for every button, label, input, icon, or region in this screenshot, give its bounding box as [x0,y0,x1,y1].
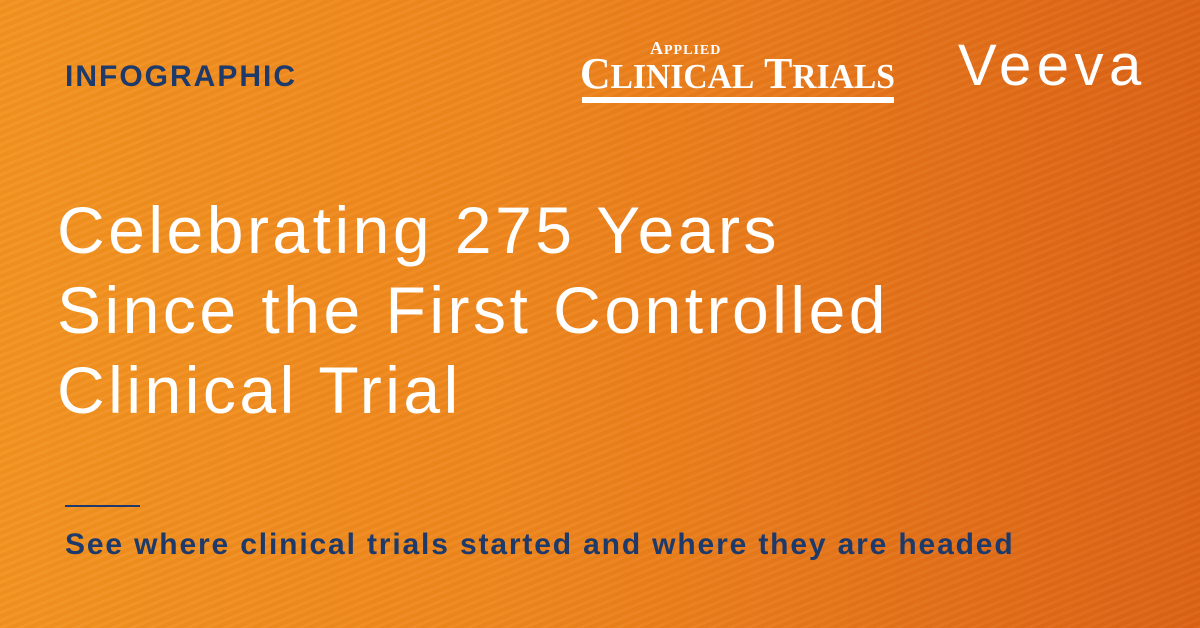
title: Since the First Controlled [57,273,889,347]
divider line [65,505,140,507]
subtitle: See where clinical trials started and where they are headed [65,528,1015,561]
title: Celebrating 275 Years [57,193,780,267]
logo: applied clinical trials: APPLIED [650,38,721,58]
logo: applied clinical trials: CLINICAL TRIALS [580,49,895,98]
title: Clinical Trial [57,353,462,427]
logo: veeva: Veeva [958,33,1147,98]
title [57,193,889,427]
label: infographic: INFOGRAPHIC [65,60,297,93]
